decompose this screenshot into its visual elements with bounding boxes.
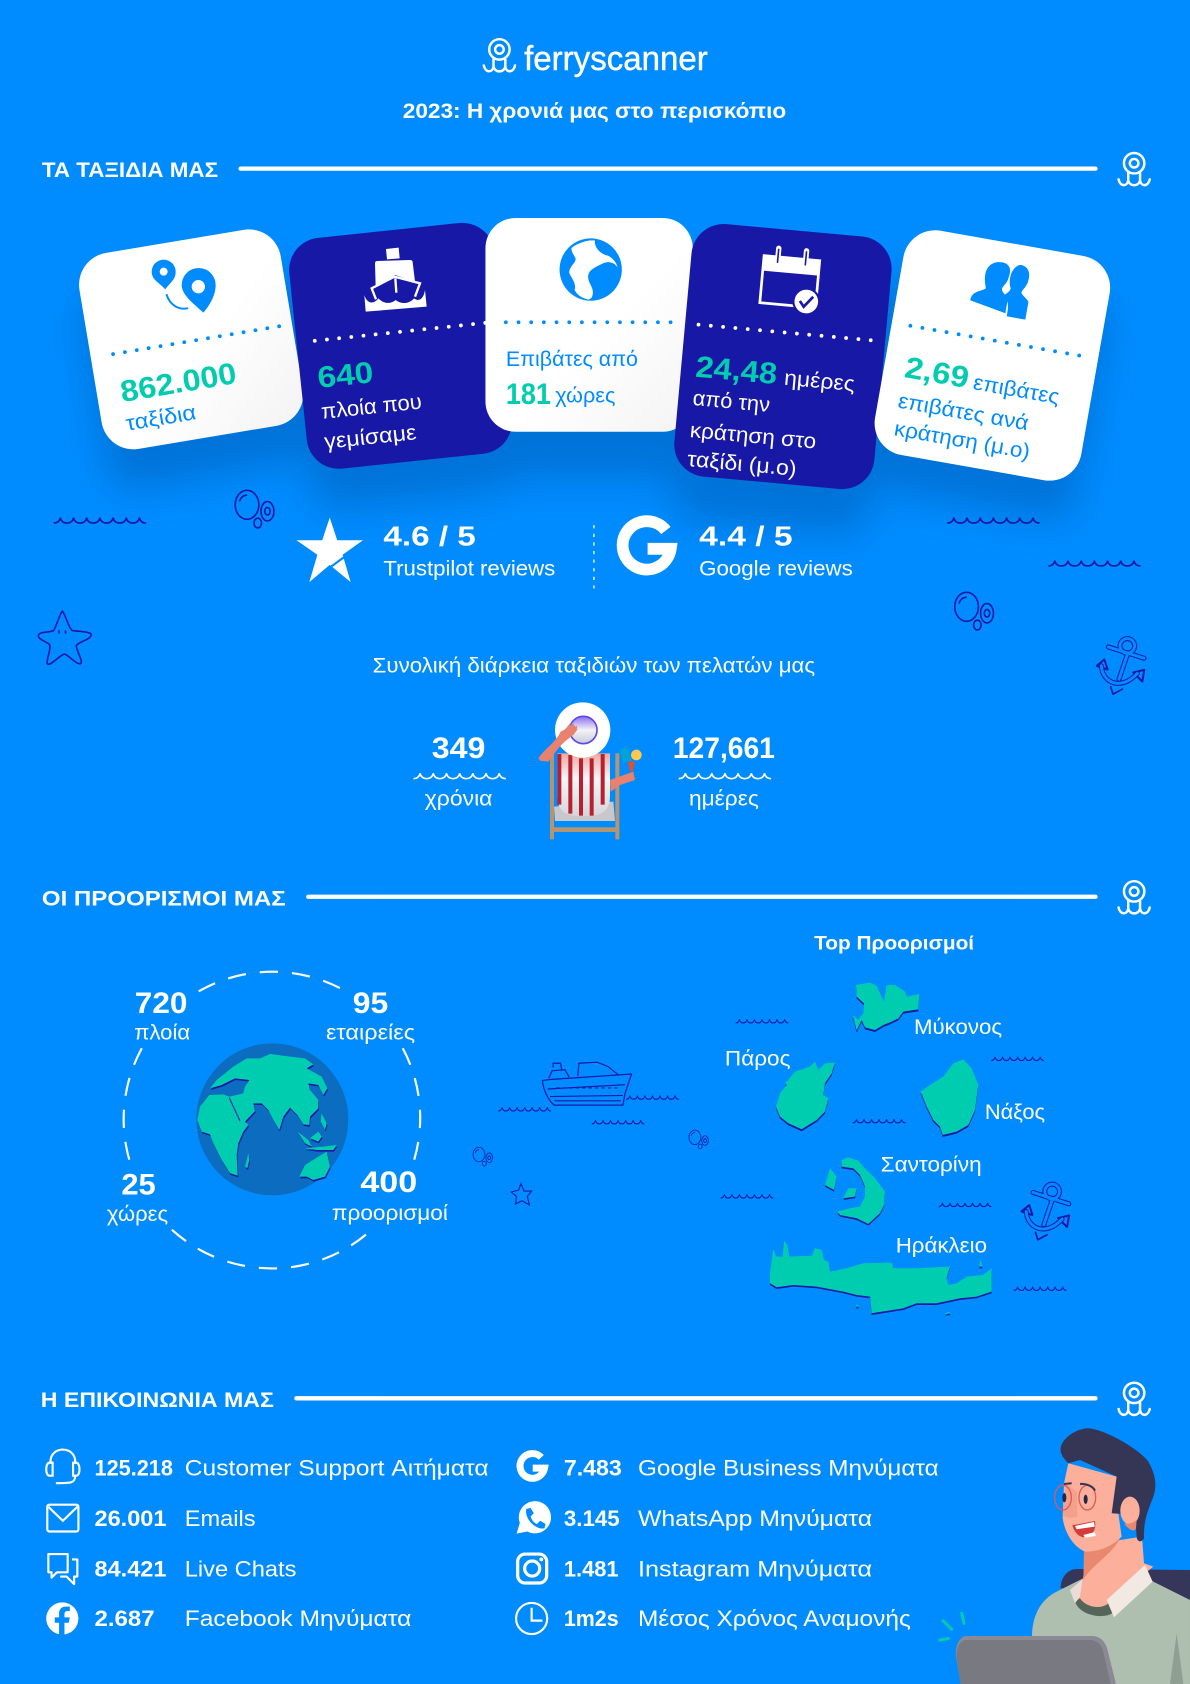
panel: booking lead time card: κράτηση στο (689, 418, 817, 453)
stat: companies: 95 (353, 987, 388, 1020)
panel: passengers per booking card: επιβάτες (971, 370, 1061, 409)
panel: trips card: ταξίδια (124, 400, 198, 436)
island: Naxos (921, 1059, 1045, 1137)
rating: trustpilot: Trustpilot reviews (383, 557, 555, 581)
section heading: communication: Η ΕΠΙΚΟΙΝΩΝΙΑ ΜΑΣ (41, 1388, 274, 1412)
icon: ship (364, 248, 427, 312)
stat: companies: εταιρείες (326, 1021, 415, 1045)
row: live chats (48, 1554, 296, 1584)
row: google business: 7.483 (564, 1456, 622, 1481)
header logo: ferryscanner (524, 40, 708, 78)
stat: countries (107, 1168, 168, 1226)
row: waiting time: 1m2s (564, 1606, 619, 1631)
row: facebook: 2.687 (95, 1606, 155, 1631)
stat: years: χρόνια (425, 786, 492, 810)
stat: days: 127,661 (673, 732, 775, 765)
row: instagram: Instagram Μηνύματα (638, 1557, 872, 1582)
stat: destinations: προορισμοί (332, 1201, 448, 1225)
panel: booking lead time card: από την (692, 386, 771, 417)
row: facebook: Facebook Μηνύματα (185, 1606, 411, 1631)
island: Santorini (825, 1153, 982, 1226)
stat: destinations (332, 1166, 448, 1225)
row: customer support: Customer Support Αιτήματα (185, 1456, 489, 1481)
icon: globe (560, 238, 622, 301)
illustration: support agent (940, 1428, 1190, 1684)
section heading: trips: ΤΑ ΤΑΞΙΔΙΑ ΜΑΣ (42, 158, 218, 182)
stat: 640: 640 (316, 356, 375, 395)
panel: passengers per booking card: κράτηση (μ.ο) (892, 416, 1032, 464)
row: google business: Google Business Μηνύματα (638, 1456, 939, 1481)
row: waiting time: Μέσος Χρόνος Αναμονής (638, 1606, 911, 1631)
panel: booking lead time card: ημέρες (783, 366, 856, 396)
panel: passengers card (485, 218, 693, 432)
subtitle: 2023: Η χρονιά μας στο περισκόπιο (403, 99, 786, 123)
map heading: Top Προορισμοί (814, 933, 974, 954)
stat: companies (326, 987, 415, 1045)
row: live chats: Live Chats (185, 1557, 296, 1582)
stat: 24,48: 24,48 (694, 351, 778, 391)
icon: small starfish (511, 1184, 532, 1205)
island: Paros (725, 1046, 835, 1131)
rating: google (623, 521, 853, 581)
panel: passengers per booking card: επιβάτες ανά (896, 389, 1030, 435)
row: customer support: 125.218 (95, 1456, 173, 1481)
illustration: person on deck chair (538, 702, 642, 839)
row: whatsapp (517, 1501, 872, 1534)
panel: booking lead time card: ταξίδι (μ.ο) (686, 447, 798, 481)
rating: trustpilot (296, 518, 555, 582)
row: emails (47, 1505, 256, 1531)
island: Heraklion (770, 1233, 992, 1316)
stat: years (413, 732, 506, 810)
icon: anchor top right (1097, 639, 1144, 694)
stat: days: ημέρες (689, 786, 759, 810)
island: Santorini: Σαντορίνη (881, 1153, 982, 1177)
decor: waves and bubbles top (54, 490, 1141, 630)
icon: map pins (152, 260, 216, 313)
card shadows (78, 259, 1112, 537)
row: live chats: 84.421 (95, 1557, 166, 1582)
island: Naxos: Νάξος (985, 1100, 1045, 1124)
stat: years: 349 (432, 732, 485, 765)
row: instagram: 1.481 (564, 1557, 619, 1582)
section heading: trips (42, 153, 1150, 185)
stat: countries: χώρες (107, 1202, 168, 1226)
row: whatsapp: 3.145 (564, 1506, 620, 1531)
section heading: destinations: ΟΙ ΠΡΟΟΡΙΣΜΟΙ ΜΑΣ (42, 886, 286, 910)
icon: calendar (759, 247, 824, 316)
panel: trips card (74, 225, 308, 454)
stat: 2,69: 2,69 (902, 351, 972, 395)
panel: passengers card: 181 (506, 378, 551, 411)
total duration heading: Συνολική διάρκεια ταξιδιών των πελατών μας (373, 653, 815, 677)
icon: ferry outline (542, 1062, 632, 1105)
row: emails: Emails (185, 1506, 256, 1531)
stat: days (673, 732, 775, 810)
dashed ring (124, 972, 420, 1268)
rating: trustpilot: 4.6 / 5 (383, 521, 476, 552)
panel: booking lead time card (671, 221, 894, 492)
panel: ships card: πλοία που (320, 389, 423, 424)
icon: people (969, 257, 1035, 320)
stat: ships (134, 987, 190, 1045)
panel: ships card (286, 220, 515, 472)
row: emails: 26.001 (95, 1506, 166, 1531)
row: instagram (518, 1554, 872, 1583)
row: whatsapp: WhatsApp Μηνύματα (638, 1506, 872, 1531)
stat: 862.000: 862.000 (118, 357, 239, 409)
section heading: communication (41, 1383, 1150, 1415)
decor: map waves (473, 1019, 1066, 1290)
stat: 181: Επιβάτες από (506, 347, 638, 371)
stat: ships: 720 (135, 987, 187, 1020)
island: Mykonos: Μύκονος (914, 1015, 1002, 1039)
row: waiting time (516, 1603, 911, 1634)
section heading: destinations (42, 881, 1150, 913)
island: Heraklion: Ηράκλειο (896, 1233, 987, 1257)
row: google business (520, 1454, 939, 1481)
island: Mykonos (853, 983, 1002, 1039)
icon: anchor map (1022, 1184, 1069, 1240)
row: customer support (46, 1450, 489, 1483)
stat: countries: 25 (121, 1168, 156, 1201)
panel: ships card: γεμίσαμε (323, 420, 418, 454)
stat: destinations: 400 (360, 1166, 417, 1199)
rating: google: 4.4 / 5 (699, 521, 793, 552)
island: Paros: Πάρος (725, 1046, 790, 1070)
rating: google: Google reviews (699, 557, 853, 581)
icon: starfish (38, 611, 91, 664)
illustration: globe (196, 1043, 348, 1195)
panel: passengers per booking card (869, 225, 1115, 486)
stat: ships: πλοία (134, 1021, 190, 1045)
panel: passengers card: χώρες (555, 384, 615, 408)
row: facebook (46, 1602, 411, 1635)
